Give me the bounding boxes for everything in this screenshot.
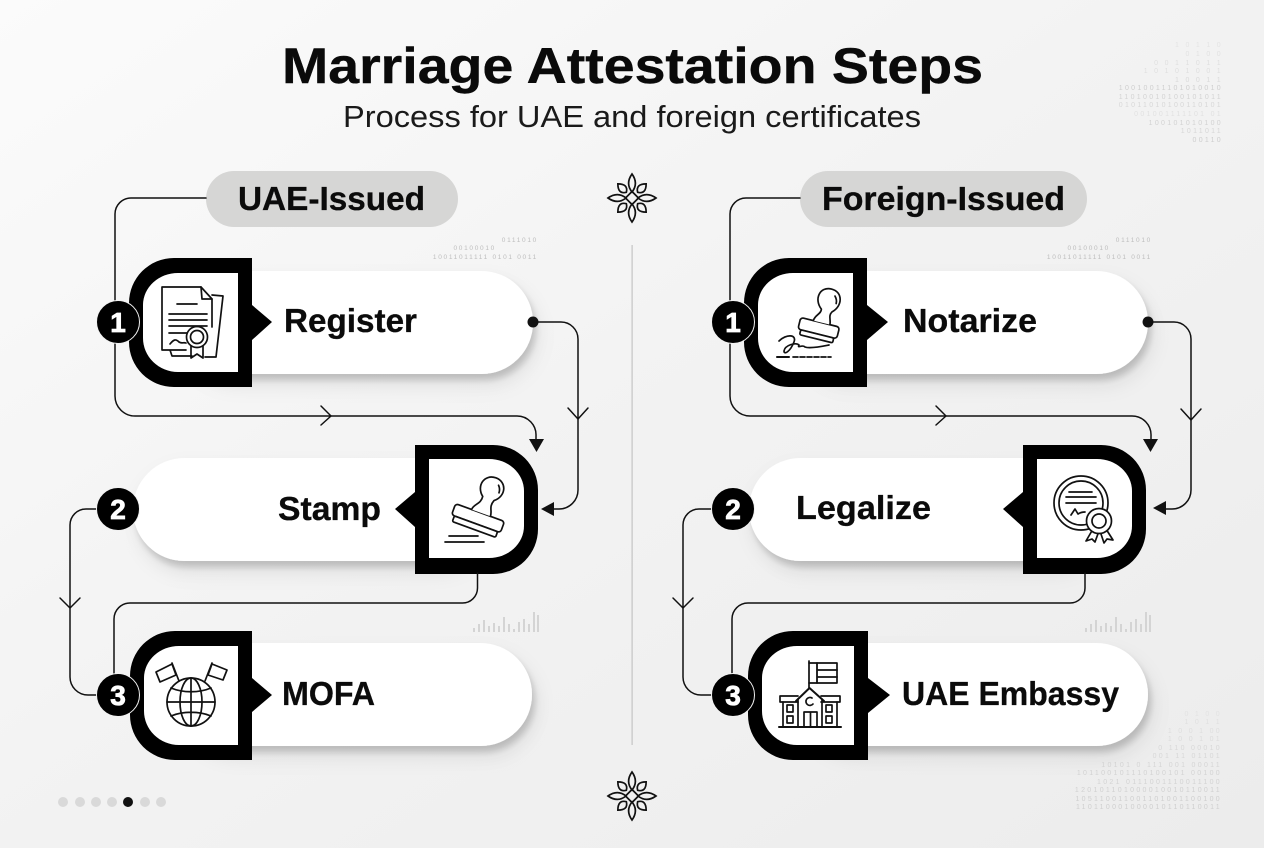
number badge 3 — [96, 674, 140, 716]
number badge 3: 3 — [110, 680, 126, 711]
connector: step 2 to step 3 — [732, 573, 1085, 678]
icon: stamp with signature — [777, 283, 848, 357]
binary pattern: bottom right: 1 0 0 1 00 — [1168, 728, 1222, 735]
binary decoration — [433, 237, 538, 261]
binary pattern: top right: 001001111101 01 — [1134, 111, 1223, 118]
binary pattern: top right: 1 0 0 1 1 — [1175, 77, 1223, 84]
binary pattern: bottom right: 0 110 00010 — [1158, 745, 1222, 752]
icon: globe with flags — [156, 663, 227, 726]
binary pattern: top right: 00110 — [1193, 137, 1223, 144]
number badge 2: 2 — [725, 494, 741, 525]
pagination dots — [58, 797, 166, 807]
binary pattern: top right: 1 0 1 1 0 — [1175, 42, 1223, 49]
binary decoration: 10011011111 0101 0011 — [1047, 254, 1152, 261]
icon: certificate seal — [1054, 476, 1113, 543]
binary decoration: 00100010 — [1067, 245, 1110, 252]
bar sparkline decoration — [1086, 612, 1150, 632]
connector: heading to step 2 — [730, 198, 1158, 452]
number badge 1: 1 — [110, 307, 126, 338]
panel: UAE-issued — [60, 171, 588, 760]
binary pattern: bottom right: 120101101000010010110011 — [1075, 787, 1222, 794]
step 2: Stamp — [133, 445, 538, 574]
binary pattern: bottom right: 1 0 1 1 — [1184, 719, 1222, 726]
label: Register — [284, 302, 417, 339]
connector: step 2 to step 3 — [114, 573, 478, 678]
binary pattern: bottom right: 105110011001101001100100 — [1075, 796, 1222, 803]
step 1: Notarize — [744, 258, 1148, 387]
binary pattern: top right: 11010010100101011 — [1119, 94, 1223, 101]
number badge 3: 3 — [725, 680, 741, 711]
binary pattern: top right — [1119, 42, 1223, 144]
binary pattern: top right: 1 0 1 0 1 0 0 1 — [1144, 68, 1223, 75]
number badge 1 — [96, 300, 140, 344]
icon: rubber stamp — [445, 468, 518, 542]
binary pattern: bottom right: 1021 0111001110011100 — [1097, 779, 1222, 786]
number badge 2: 2 — [110, 494, 126, 525]
label: Notarize — [903, 302, 1037, 339]
step 2: Legalize — [749, 445, 1146, 574]
heading pill: Foreign-Issued: Foreign-Issued — [822, 180, 1065, 217]
connector: step 1 to step 2 — [528, 316, 588, 516]
heading pill: UAE-Issued: UAE-Issued — [238, 180, 425, 217]
binary decoration: 10011011111 0101 0011 — [433, 254, 538, 261]
binary pattern: top right: 100101010100 — [1149, 120, 1223, 127]
step 3: UAE Embassy — [748, 631, 1148, 760]
binary pattern: top right: 0 0 1 1 0 1 1 — [1154, 60, 1223, 67]
binary pattern: top right: 1011011 — [1181, 128, 1223, 135]
icon: document with seal — [162, 287, 223, 358]
binary decoration: 00100010 — [453, 245, 496, 252]
binary pattern: top right: 0 1 0 0 — [1185, 51, 1223, 58]
number badge 3 — [712, 674, 754, 716]
binary pattern: bottom right: 101100101110100101 00100 — [1077, 770, 1222, 777]
binary decoration — [1047, 237, 1152, 261]
binary decoration: 0111010 — [502, 237, 538, 244]
connector: step 1 to step 2 — [1142, 316, 1201, 515]
title: Marriage Attestation Steps — [282, 38, 983, 94]
binary decoration: 0111010 — [1116, 237, 1152, 244]
binary pattern: bottom right: 10101 0 111 001 00011 — [1101, 762, 1222, 769]
icon: bottom flourish — [608, 772, 656, 820]
number badge 1 — [712, 300, 754, 344]
step 3: MOFA — [130, 631, 532, 760]
connector: number 2 to number 3 — [60, 509, 100, 695]
binary pattern: top right: 10010011101010010 — [1119, 85, 1223, 92]
center divider — [632, 245, 633, 745]
panel: foreign-issued — [673, 171, 1201, 760]
number badge 2 — [712, 488, 754, 530]
binary pattern: bottom right: 1 0 0 1 01 — [1168, 736, 1222, 743]
bar sparkline decoration — [474, 612, 538, 632]
binary pattern: top right: 01011010100110101 — [1119, 102, 1223, 109]
label: UAE Embassy — [902, 675, 1120, 712]
binary pattern: bottom right: 110110001000010110110011 — [1076, 804, 1222, 811]
step 1: Register — [129, 258, 533, 387]
subtitle: Process for UAE and foreign certificates — [343, 99, 921, 134]
label: Stamp — [278, 490, 381, 527]
connector: heading to step 2 — [115, 198, 544, 452]
binary pattern: bottom right — [1075, 711, 1222, 811]
number badge 2 — [96, 488, 140, 530]
icon: top flourish — [608, 174, 656, 222]
heading pill: Foreign-Issued — [800, 171, 1087, 227]
binary pattern: bottom right: 0 1 0 0 — [1184, 711, 1222, 718]
label: MOFA — [282, 675, 375, 712]
icon: embassy building — [779, 661, 841, 727]
heading pill: UAE-Issued — [206, 171, 458, 227]
connector: number 2 to number 3 — [673, 509, 715, 695]
binary pattern: bottom right: 001 11 01101 — [1153, 753, 1222, 760]
number badge 1: 1 — [725, 307, 741, 338]
label: Legalize — [796, 489, 931, 526]
